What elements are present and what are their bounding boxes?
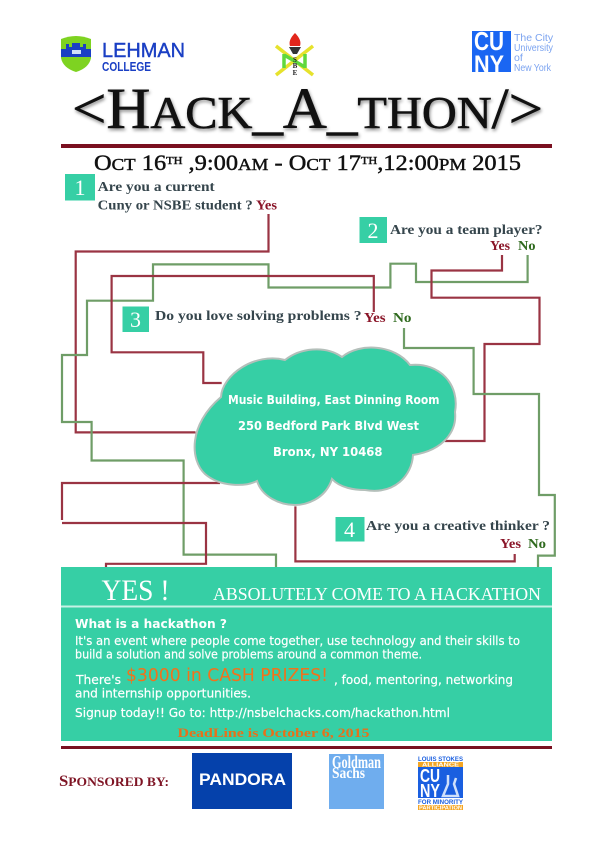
text: signup link: Signup today!! Go to: http://nsbelchacks.com/hackathon.html <box>75 705 450 720</box>
venue cloud: 250 Bedford Park Blvd West <box>238 419 419 433</box>
text: prizes: and internship opportunities. <box>75 686 251 700</box>
footer rule <box>61 746 552 749</box>
logo: Louis Stokes Alliance CUNY: ALLIANCE <box>422 762 460 768</box>
logo: NSBE torch <box>276 33 313 77</box>
text: prizes: $3000 in CASH PRIZES! <box>126 665 328 686</box>
date line: AM - OCT 17 <box>238 150 358 175</box>
text: what is a hackathon: What is a hackathon ? <box>75 617 227 631</box>
date line: ,9:00 <box>182 150 238 175</box>
logo: Lehman College: LEHMAN <box>102 40 185 62</box>
question 1 <box>65 174 278 214</box>
text: prizes: There's <box>75 672 121 687</box>
logo: Louis Stokes Alliance CUNY: PARTICIPATION <box>419 806 462 812</box>
wire: question 2 yes to venue <box>432 255 540 441</box>
wire: question 3 no route <box>404 328 555 572</box>
wire: question 1 yes to venue <box>76 214 268 432</box>
logo: Lehman College <box>61 36 185 74</box>
question 2: Yes <box>490 239 511 254</box>
logo: CUNY: of <box>514 52 523 64</box>
question 1: Are you a current <box>98 180 215 195</box>
wire: lower left loop <box>62 483 220 571</box>
logo: NSBE torch: E <box>293 69 298 77</box>
logo: Louis Stokes Alliance CUNY: FOR MINORITY <box>418 800 463 806</box>
date line: PM 2015 <box>439 150 516 175</box>
logo: Louis Stokes Alliance CUNY: NY <box>420 781 440 801</box>
heading: yes: YES ! <box>102 574 170 607</box>
date line: ,12:00 <box>377 150 439 175</box>
logo: Lehman College: COLLEGE <box>102 60 151 74</box>
title rule <box>61 144 552 148</box>
logo: Louis Stokes Alliance CUNY <box>418 757 463 812</box>
question 3: 3 <box>130 307 141 332</box>
logo: NSBE torch: S <box>293 56 297 64</box>
logo: Louis Stokes Alliance CUNY: CU <box>420 766 440 786</box>
text: description: It's an event where people come together, use technology and their skills to <box>75 633 520 648</box>
date line: TH <box>166 155 183 167</box>
question 2: No <box>518 239 536 254</box>
logo: Pandora <box>192 753 292 809</box>
heading: absolutely come to a hackathon: ABSOLUTELY COME TO A HACKATHON <box>213 584 541 604</box>
question 3: Do you love solving problems ? <box>155 309 362 324</box>
logo: Goldman Sachs <box>329 752 384 809</box>
wire: question 2 no route <box>62 255 528 572</box>
flowchart wires <box>62 214 555 572</box>
text: prizes <box>75 665 513 700</box>
logo: CUNY: The City <box>514 32 554 44</box>
wire: question 4 yes to venue <box>295 506 515 561</box>
logo: Louis Stokes Alliance CUNY: LOUIS STOKES <box>418 757 463 763</box>
question 4: 4 <box>344 517 355 542</box>
date line: OCT 16 <box>94 150 163 175</box>
question 2: 2 <box>368 218 378 243</box>
question 4: Are you a creative thinker ? <box>366 519 550 534</box>
title: <HACK_A_THON/> <box>72 76 543 141</box>
question 4: No <box>528 537 546 552</box>
date line <box>94 150 521 175</box>
venue cloud: Bronx, NY 10468 <box>273 445 382 459</box>
logo: Goldman Sachs: Goldman <box>332 752 381 772</box>
question 3: Yes <box>364 311 386 326</box>
logo: Pandora: PANDORA <box>199 771 286 789</box>
question 2 <box>360 217 542 254</box>
date line: TH <box>361 155 377 167</box>
sponsored by: SPONSORED BY: <box>59 773 169 790</box>
logo: CUNY: University <box>514 42 554 54</box>
question 4 <box>336 517 550 552</box>
wire: question 3 yes to venue <box>112 276 374 383</box>
panel: call to action <box>61 567 552 741</box>
text: prizes: , food, mentoring, networking <box>334 672 513 687</box>
question 4: Yes <box>500 537 522 552</box>
logo: CUNY: NY <box>474 51 504 78</box>
text: description: build a solution and solve problems around a common theme. <box>75 646 422 662</box>
question 1: Cuny or NSBE student ? <box>98 198 253 214</box>
question 2: Are you a team player? <box>390 223 542 238</box>
question 3: No <box>393 311 412 326</box>
logo: CUNY: New York <box>514 62 552 74</box>
logo: CUNY <box>472 26 554 78</box>
logo: CUNY: CU <box>474 26 504 56</box>
venue cloud <box>195 348 456 505</box>
logo: Goldman Sachs: Sachs <box>332 765 365 782</box>
question 1: 1 <box>74 175 86 200</box>
text: deadline: DeadLine is October 6, 2015 <box>178 725 370 740</box>
text: description <box>75 633 520 662</box>
logo: NSBE torch: B <box>293 62 298 70</box>
question 3 <box>122 306 412 332</box>
venue cloud: Music Building, East Dinning Room <box>228 393 440 407</box>
question 1: Yes <box>256 198 278 214</box>
